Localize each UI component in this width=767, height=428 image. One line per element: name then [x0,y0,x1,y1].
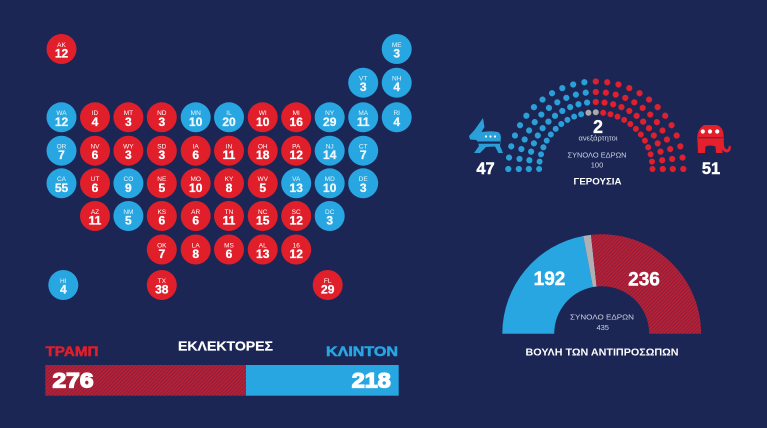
heading: house of representatives: ΒΟΥΛΗ ΤΩΝ ΑΝΤΙΠΡΟΣΩΠΩΝ [526,348,678,358]
state WV [248,168,278,198]
state WY: WY [123,143,134,150]
state VA [281,168,311,198]
segment: Democrats 192 [502,236,593,334]
state PA: PA [292,143,301,150]
value: 192: 192 [534,269,565,290]
state ID [80,102,110,132]
state DC: 3 [326,214,333,228]
state AL: AL [259,242,267,249]
state TX: TX [158,278,167,285]
chart: house of representatives half-donut [502,234,701,334]
state HI: HI [60,278,67,285]
state KS: 6 [158,214,165,228]
state KY [214,168,244,198]
state TN: TN [225,209,234,216]
state NH [382,68,412,98]
state OK: OK [157,242,167,249]
panel: electoral votes bar [45,338,399,396]
state NM: NM [123,209,133,216]
state AK: AK [57,42,66,49]
panel: electoral map of states [46,34,412,300]
state SC: 12 [290,214,303,228]
state NM: 5 [125,214,132,228]
state WV: WV [257,176,269,183]
state UT [80,168,110,198]
state DC [315,201,345,231]
segment: Republicans 236 [591,234,701,334]
state ID: 4 [92,115,99,129]
state IN [214,136,244,166]
seats: Republicans [593,78,686,172]
state MO: MO [190,176,201,183]
state WA: WA [56,110,67,117]
state AZ: 11 [89,214,102,228]
state LA: LA [192,242,200,249]
state IN: 11 [223,148,236,162]
text: house total seats [570,312,634,332]
state MD: MD [325,176,335,183]
state MI: 16 [290,115,303,129]
state LA [181,234,211,264]
state MN: MN [191,110,201,117]
state NE: 5 [158,181,165,195]
state CO: 9 [125,181,132,195]
state OR [46,136,76,166]
state IA: IA [193,143,199,150]
state VT: VT [359,75,367,82]
state SC: SC [292,209,301,216]
state MS [214,234,244,264]
state NY [315,102,345,132]
heading: senate: ΓΕΡΟΥΣΙΑ [574,176,622,188]
state ID: ID [92,110,99,117]
state NJ [315,136,345,166]
state CA: 55 [55,181,68,195]
state MS: MS [224,242,235,249]
state MA: MA [358,110,369,117]
chart: senate seats hemicycle [505,78,686,172]
state OR: OR [57,143,67,150]
state AK [46,34,76,64]
value: Democrat seats: 47 [476,160,495,178]
state OH: 18 [256,148,270,162]
label: Trump: ΤΡΑΜΠ [46,344,98,359]
state OK [147,234,177,264]
state SD: 3 [158,148,165,162]
state NC: NC [258,209,268,216]
text: senate total seats [568,150,626,170]
state MO [181,168,211,198]
state CT: CT [359,143,368,150]
state HI [48,270,78,300]
state OH: OH [258,143,268,150]
state TN [214,201,244,231]
state LA: 8 [192,247,199,261]
state TX [147,270,177,300]
state SC [281,201,311,231]
state RI: RI [393,110,400,117]
state VT [348,68,378,98]
state MD [315,168,345,198]
state CA [46,168,76,198]
state MO: 10 [189,181,203,195]
state RI: 4 [393,115,400,129]
state WY [113,136,143,166]
heading: electors: ΕΚΛΕΚΤΟΡΕΣ [178,338,273,354]
state TN: 11 [223,214,236,228]
state VT: 3 [360,80,367,94]
segment: others [583,235,597,287]
state OK: 7 [158,247,165,261]
state ME: 3 [393,46,400,60]
state RI [382,102,412,132]
state CO [113,168,143,198]
state 16 [281,234,311,264]
state MA: 11 [357,115,370,129]
state CA: CA [57,176,67,183]
seats: Democrats [505,79,591,172]
text: senate total seats: ΣΥΝΟΛΟ ΕΔΡΩΝ [568,150,626,160]
state ND [147,102,177,132]
state ND: 3 [158,115,165,129]
state NH: NH [392,75,402,82]
state NY: NY [325,110,335,117]
state WI [248,102,278,132]
state SD: SD [157,143,167,150]
state DE: 3 [360,181,367,195]
state KY: 8 [226,181,233,195]
text: independents label: ανεξάρτητοι [578,134,618,142]
state AL [248,234,278,264]
text: senate total seats: 100 [591,160,603,170]
state NV: 6 [92,148,99,162]
state KS: KS [157,209,167,216]
value: Republican seats: 51 [702,160,720,178]
state OH [248,136,278,166]
state WA [46,102,76,132]
text: independents count: 2 [593,117,603,137]
state CO: CO [124,176,133,183]
state AL: 13 [256,247,270,261]
state VA: VA [292,176,301,183]
state NC: 15 [256,214,270,228]
state WV: 5 [259,181,266,195]
state NJ: 14 [323,148,337,162]
state IN: IN [226,143,233,150]
text: house total seats: ΣΥΝΟΛΟ ΕΔΡΩΝ [570,312,634,322]
value: Clinton 218: 218 [352,370,391,392]
state CT [348,136,378,166]
state PA: 12 [290,148,303,162]
state ME [382,34,412,64]
state IL: 20 [222,115,236,129]
state MN: 10 [189,115,203,129]
state AR: AR [191,209,201,216]
state AK: 12 [55,46,68,60]
state AZ [80,201,110,231]
state KS [147,201,177,231]
state TX: 38 [155,282,169,296]
state VA: 13 [290,181,303,195]
state NY: 29 [323,115,337,129]
icon: Republican elephant [697,125,731,153]
state MI: MI [293,110,300,117]
state ME: ME [392,42,402,49]
seats: Independents [585,109,599,116]
bar segment: Clinton [246,365,399,396]
state IA: 6 [192,148,199,162]
state WY: 3 [125,148,132,162]
state WA: 12 [55,115,68,129]
state AR [181,201,211,231]
state AR: 6 [192,214,199,228]
icon: Democrat donkey [469,118,503,153]
state DE: DE [359,176,368,183]
state 16: 12 [290,247,303,261]
state IL [214,102,244,132]
state FL: 29 [321,282,335,296]
state HI: 4 [60,282,67,296]
state NE: NE [157,176,167,183]
state MI [281,102,311,132]
state IL: IL [226,110,232,117]
state DC: DC [325,209,335,216]
state AZ: AZ [91,209,99,216]
state MD: 10 [323,181,337,195]
state CT: 7 [360,148,367,162]
state SD [147,136,177,166]
state FL [313,270,343,300]
state UT: 6 [92,181,99,195]
state MS: 6 [226,247,233,261]
state NV: NV [90,143,100,150]
state MA [348,102,378,132]
state NC [248,201,278,231]
state KY: KY [225,176,234,183]
state NH: 4 [393,80,400,94]
state ND: ND [157,110,167,117]
value: 236: 236 [628,270,660,290]
state NM [113,201,143,231]
state MT: MT [124,110,133,117]
text: house total seats: 435 [596,323,609,332]
state OR: 7 [58,148,65,162]
state NV [80,136,110,166]
state WI: 10 [256,115,270,129]
state MN [181,102,211,132]
state UT: UT [91,176,99,183]
state MT: 3 [125,115,132,129]
state NE [147,168,177,198]
state IA [181,136,211,166]
state FL: FL [324,278,332,285]
label: Clinton: ΚΛΙΝΤΟΝ [326,344,398,359]
bar segment: Trump [45,365,246,396]
state PA [281,136,311,166]
state DE [348,168,378,198]
state NJ: NJ [326,143,334,150]
state WI: WI [259,110,267,117]
state 16: 16 [293,242,300,249]
value: Trump 276: 276 [52,370,94,392]
state MT [113,102,143,132]
